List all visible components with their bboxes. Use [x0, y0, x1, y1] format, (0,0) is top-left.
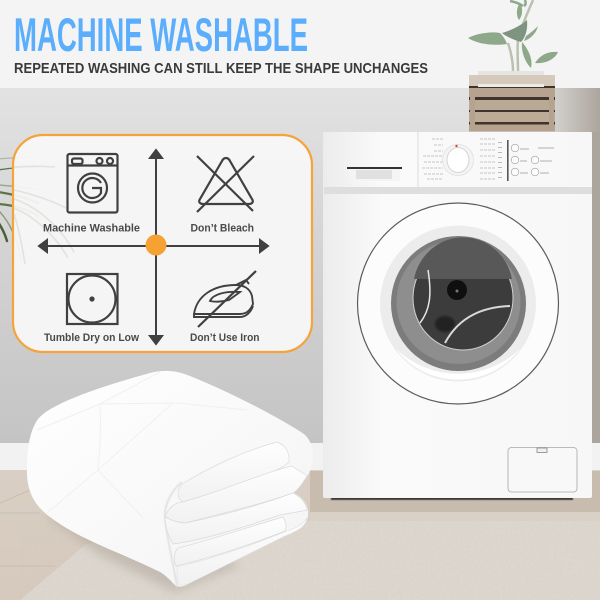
label: machine washable: Machine Washable: [43, 222, 140, 234]
filter hatch: [508, 448, 577, 492]
detergent drawer: [347, 167, 402, 181]
fifth lobe: [177, 518, 307, 585]
third lobe: [165, 493, 307, 544]
title: MACHINE WASHABLE: [14, 8, 308, 61]
potted plant: [468, 0, 558, 76]
fold crease: [165, 482, 182, 587]
upper lobe: [178, 442, 289, 502]
door: [358, 203, 558, 404]
vertical arrow: [150, 150, 162, 344]
label: don't bleach: Don’t Bleach: [190, 222, 254, 234]
horizontal arrow: [39, 240, 268, 252]
quilt stitching: [37, 372, 247, 518]
palm leaves behind panel: [0, 157, 38, 262]
control panel: [418, 132, 554, 194]
icon: machine washable: [68, 154, 118, 212]
icon: don't use iron: [194, 271, 256, 327]
label: don't use iron: Don’t Use Iron: [190, 332, 260, 344]
icon: tumble dry low: [67, 274, 118, 324]
second lobe: [165, 466, 307, 523]
wooden crate: [469, 75, 555, 132]
rug: [20, 521, 600, 600]
subtitle: REPEATED WASHING CAN STILL KEEP THE SHAPE UNCHANGES: [14, 60, 428, 77]
label: tumble dry on low: Tumble Dry on Low: [44, 332, 139, 344]
icon: don't bleach: [197, 156, 254, 212]
folded duvet: [27, 371, 313, 592]
washing machine: [323, 132, 592, 500]
fourth lobe: [174, 517, 286, 566]
panel: care symbols: [13, 135, 312, 352]
centre dot: [146, 234, 166, 256]
